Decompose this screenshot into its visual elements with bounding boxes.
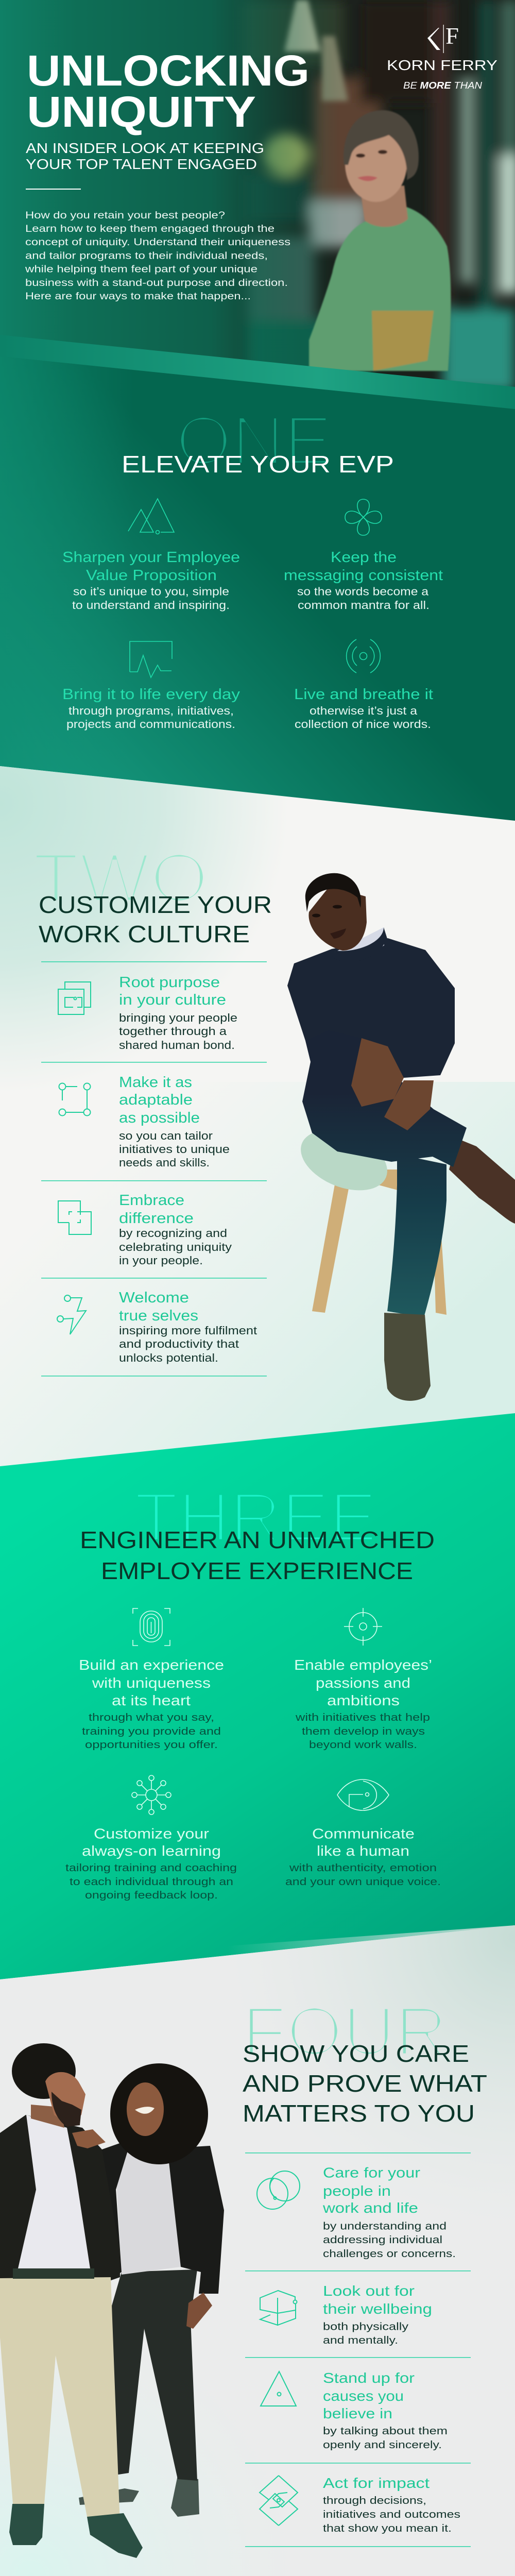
item: build an experience: through what you say,	[89, 1712, 214, 1723]
item: communicate like a human: like a human	[317, 1843, 409, 1859]
photo: seated man	[287, 873, 515, 1401]
subtitle: AN INSIDER LOOK AT KEEPING	[26, 140, 264, 156]
item: enable passions: passions and	[316, 1675, 410, 1691]
item: adaptable	[59, 1074, 230, 1169]
icon: offset squares	[58, 1201, 91, 1234]
item: care for your people: challenges or concerns.	[323, 2248, 456, 2260]
item: embrace difference: Embrace	[119, 1192, 184, 1209]
item: care for your people: addressing individual	[323, 2234, 442, 2246]
diagonal accent band	[0, 335, 515, 412]
icon: overlapping circles	[257, 2171, 300, 2209]
item: enable passions	[294, 1608, 432, 1751]
heading: SHOW YOU CARE	[243, 2040, 469, 2067]
item: care for your people: people in	[323, 2183, 391, 2199]
heading	[80, 1527, 435, 1584]
item: communicate like a human: and your own unique voice.	[285, 1876, 441, 1888]
item: build an experience: at its heart	[112, 1692, 191, 1708]
item: communicate like a human: Communicate	[312, 1826, 415, 1841]
item: care for your people	[257, 2165, 456, 2260]
intro text: while helping them feel part of your unique	[25, 264, 258, 275]
photo: woman in green sweater	[309, 110, 451, 371]
item: bring it to life: projects and communications.	[66, 718, 235, 731]
item: bring it to life	[62, 641, 241, 731]
item: act for impact: that show you mean it.	[323, 2523, 452, 2534]
panel: hero	[0, 0, 515, 397]
icon: network	[132, 1775, 171, 1815]
item: build an experience: Build an experience	[79, 1657, 224, 1673]
item: act for impact	[260, 2475, 460, 2534]
icon: eye	[337, 1780, 389, 1810]
item: always-on learning	[65, 1775, 237, 1901]
item: stand up for causes: by talking about them	[323, 2426, 448, 2437]
item: stand up for causes: causes you	[323, 2388, 404, 2404]
item: sharpen EVP: Value Proposition	[86, 567, 217, 584]
item: root purpose: Root purpose	[119, 974, 220, 991]
item: act for impact: Act for impact	[323, 2475, 430, 2491]
icon: target	[344, 1608, 382, 1646]
heading: ELEVATE YOUR EVP	[122, 451, 394, 478]
item: enable passions: ambitions	[327, 1692, 400, 1708]
icon: overlapping squares	[58, 982, 91, 1014]
item: act for impact: through decisions,	[323, 2495, 426, 2506]
icon: mountains	[128, 499, 174, 534]
item: embrace difference: in your people.	[119, 1254, 203, 1267]
item: bring it to life: Bring it to life every day	[62, 686, 241, 703]
icon: flower knot	[345, 499, 382, 535]
title	[27, 46, 310, 136]
item: keep messaging consistent: Keep the	[331, 549, 397, 566]
section numeral: three: THREE	[134, 1478, 377, 1556]
item: embrace difference: celebrating uniquity	[119, 1241, 232, 1253]
item: live and breathe: collection of nice words.	[295, 718, 431, 731]
item: always-on learning: always-on learning	[82, 1843, 221, 1859]
icon: open box	[260, 2291, 297, 2325]
item: welcome true selves: and productivity that	[119, 1337, 239, 1350]
item: always-on learning: ongoing feedback loop.	[85, 1890, 218, 1901]
item: enable passions: with initiatives that help	[295, 1712, 430, 1723]
item: adaptable: needs and skills.	[119, 1156, 210, 1169]
item: welcome true selves: true selves	[119, 1308, 198, 1324]
item: look out for wellbeing: both physically	[323, 2321, 408, 2333]
item: keep messaging consistent: common mantra for all.	[298, 599, 430, 612]
item: adaptable: Make it as	[119, 1074, 192, 1091]
logo: Korn Ferry	[387, 23, 497, 91]
item: look out for wellbeing: their wellbeing	[323, 2301, 432, 2317]
item: sharpen EVP: to understand and inspiring.	[72, 599, 230, 612]
item: look out for wellbeing: Look out for	[323, 2283, 415, 2299]
heading: ENGINEER AN UNMATCHED	[80, 1527, 435, 1553]
item: build an experience: with uniqueness	[92, 1675, 211, 1691]
intro text: business with a stand-out purpose and direction.	[25, 278, 288, 289]
item: stand up for causes: openly and sincerely.	[323, 2439, 442, 2451]
item: enable passions: beyond work walls.	[309, 1739, 417, 1751]
logo: Korn Ferry: F	[445, 23, 459, 49]
subtitle	[26, 140, 264, 172]
heading: AND PROVE WHAT	[243, 2070, 487, 2097]
item: root purpose	[58, 974, 237, 1052]
icon: interlocked diamonds	[260, 2476, 298, 2526]
item: care for your people: by understanding and	[323, 2221, 447, 2232]
intro text: Learn how to keep them engaged through the	[25, 224, 274, 234]
item: root purpose: bringing your people	[119, 1011, 237, 1024]
item: stand up for causes	[261, 2370, 448, 2451]
item: adaptable: initiatives to unique	[119, 1143, 230, 1156]
intro text: How do you retain your best people?	[25, 210, 225, 221]
subtitle: YOUR TOP TALENT ENGAGED	[26, 156, 257, 172]
icon: broadcast rings	[347, 639, 380, 673]
item: sharpen EVP	[62, 499, 240, 612]
item: live and breathe: Live and breathe it	[294, 686, 433, 703]
item: communicate like a human	[285, 1780, 441, 1888]
icon: lightning nodes	[57, 1295, 86, 1334]
item: adaptable: adaptable	[119, 1092, 193, 1108]
panel: two	[0, 766, 515, 1468]
item: embrace difference	[58, 1192, 232, 1267]
item: look out for wellbeing	[260, 2283, 432, 2346]
icon: triangle	[261, 2371, 296, 2406]
item: embrace difference: by recognizing and	[119, 1227, 227, 1240]
item: adaptable: as possible	[119, 1110, 200, 1126]
item: sharpen EVP: Sharpen your Employee	[62, 549, 240, 566]
item: care for your people: work and life	[322, 2200, 418, 2216]
item: keep messaging consistent	[284, 499, 443, 612]
heading: EMPLOYEE EXPERIENCE	[101, 1557, 413, 1584]
item: root purpose: together through a	[119, 1025, 227, 1038]
photo: two colleagues laughing	[0, 2043, 224, 2558]
item: welcome true selves: unlocks potential.	[119, 1351, 218, 1364]
item: embrace difference: difference	[119, 1210, 194, 1227]
title: UNLOCKING	[27, 46, 310, 95]
intro text: and tailor programs to their individual needs,	[25, 250, 268, 262]
item: live and breathe: otherwise it’s just a	[310, 704, 418, 717]
title: UNIQUITY	[27, 88, 256, 136]
item: keep messaging consistent: so the words become a	[297, 585, 429, 598]
panel: three	[0, 1413, 515, 1979]
section numeral: one: ONE	[176, 402, 332, 479]
intro text	[25, 210, 290, 302]
item: always-on learning: Customize your	[94, 1826, 209, 1841]
item: stand up for causes: believe in	[323, 2405, 392, 2421]
item: build an experience	[79, 1608, 224, 1751]
item: root purpose: shared human bond.	[119, 1039, 235, 1052]
hero photo background	[0, 0, 515, 397]
item: keep messaging consistent: messaging consistent	[284, 567, 443, 584]
section numeral: four: FOUR	[242, 1992, 448, 2070]
icon: connected nodes	[59, 1083, 91, 1116]
section numeral: two: TWO	[33, 839, 209, 917]
intro text: concept of uniquity. Understand their uniqueness	[25, 237, 290, 248]
item: act for impact: initiatives and outcomes	[323, 2509, 460, 2520]
heading: WORK CULTURE	[39, 921, 250, 947]
heading	[39, 891, 272, 947]
item: sharpen EVP: so it’s unique to you, simple	[73, 585, 229, 598]
item: live and breathe	[294, 639, 433, 731]
item: bring it to life: through programs, initiatives,	[68, 704, 234, 717]
panel: four	[0, 1925, 515, 2576]
icon: fingerprint	[133, 1608, 170, 1646]
item: build an experience: opportunities you offer.	[85, 1739, 218, 1751]
item: enable passions: Enable employees’	[294, 1657, 432, 1673]
logo: Korn Ferry: KORN FERRY	[387, 57, 497, 73]
heading	[243, 2040, 487, 2127]
item: build an experience: training you provide and	[82, 1726, 221, 1737]
item: welcome true selves: Welcome	[119, 1290, 189, 1306]
item: always-on learning: to each individual through an	[70, 1876, 233, 1888]
item: stand up for causes: Stand up for	[323, 2370, 415, 2386]
item: enable passions: them develop in ways	[302, 1726, 425, 1737]
item: root purpose: in your culture	[119, 992, 226, 1008]
item: adaptable: so you can tailor	[119, 1129, 213, 1142]
item: look out for wellbeing: and mentally.	[323, 2335, 398, 2346]
item: always-on learning: tailoring training and coaching	[65, 1862, 237, 1874]
logo: Korn Ferry: BE MORE THAN	[403, 80, 483, 91]
intro text: Here are four ways to make that happen...	[25, 291, 251, 302]
item: care for your people: Care for your	[323, 2165, 420, 2180]
item: communicate like a human: with authenticity, emotion	[289, 1862, 437, 1874]
panel: one	[0, 357, 515, 824]
heading: CUSTOMIZE YOUR	[39, 891, 272, 918]
icon: pulse frame	[130, 641, 172, 677]
item: welcome true selves	[57, 1290, 257, 1364]
item: welcome true selves: inspiring more fulfilment	[119, 1324, 257, 1337]
heading: MATTERS TO YOU	[243, 2100, 475, 2127]
